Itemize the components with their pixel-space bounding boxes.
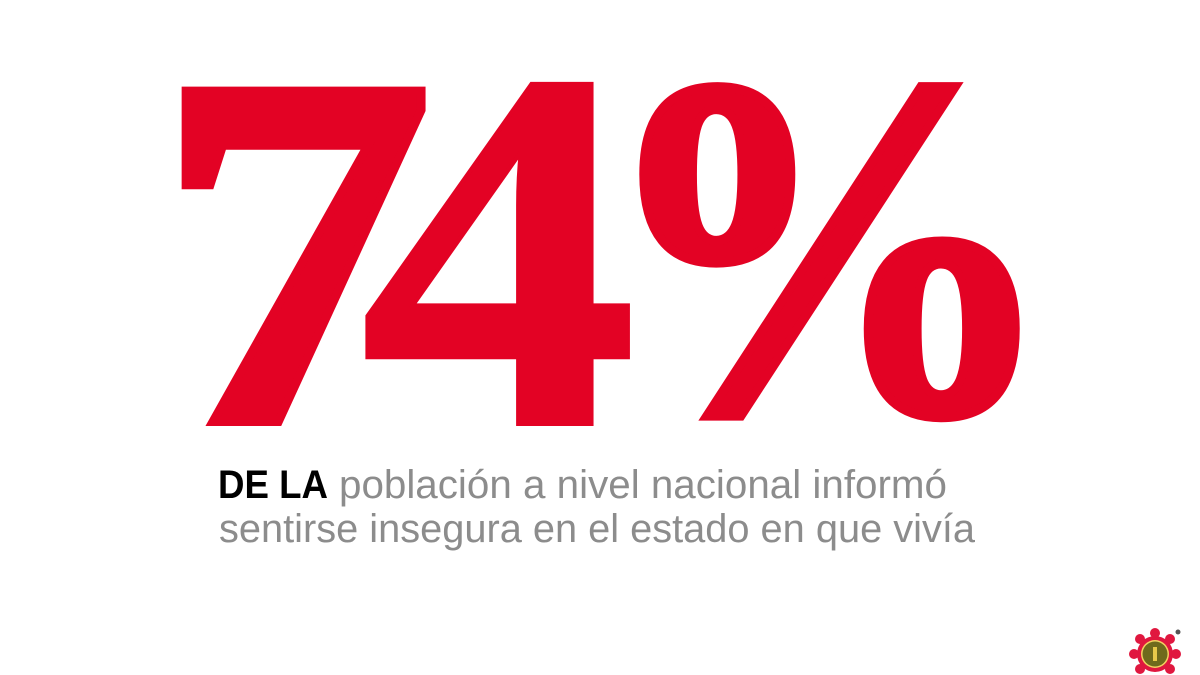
caption line 1: población a nivel nacional informó [339,463,947,507]
caption line 2: sentirse insegura en el estado en que vivía [219,507,976,551]
caption [218,463,976,551]
icon: logo seal [1129,628,1181,674]
caption lead-in: DE LA [218,463,328,507]
big number: 74% [154,0,1058,537]
